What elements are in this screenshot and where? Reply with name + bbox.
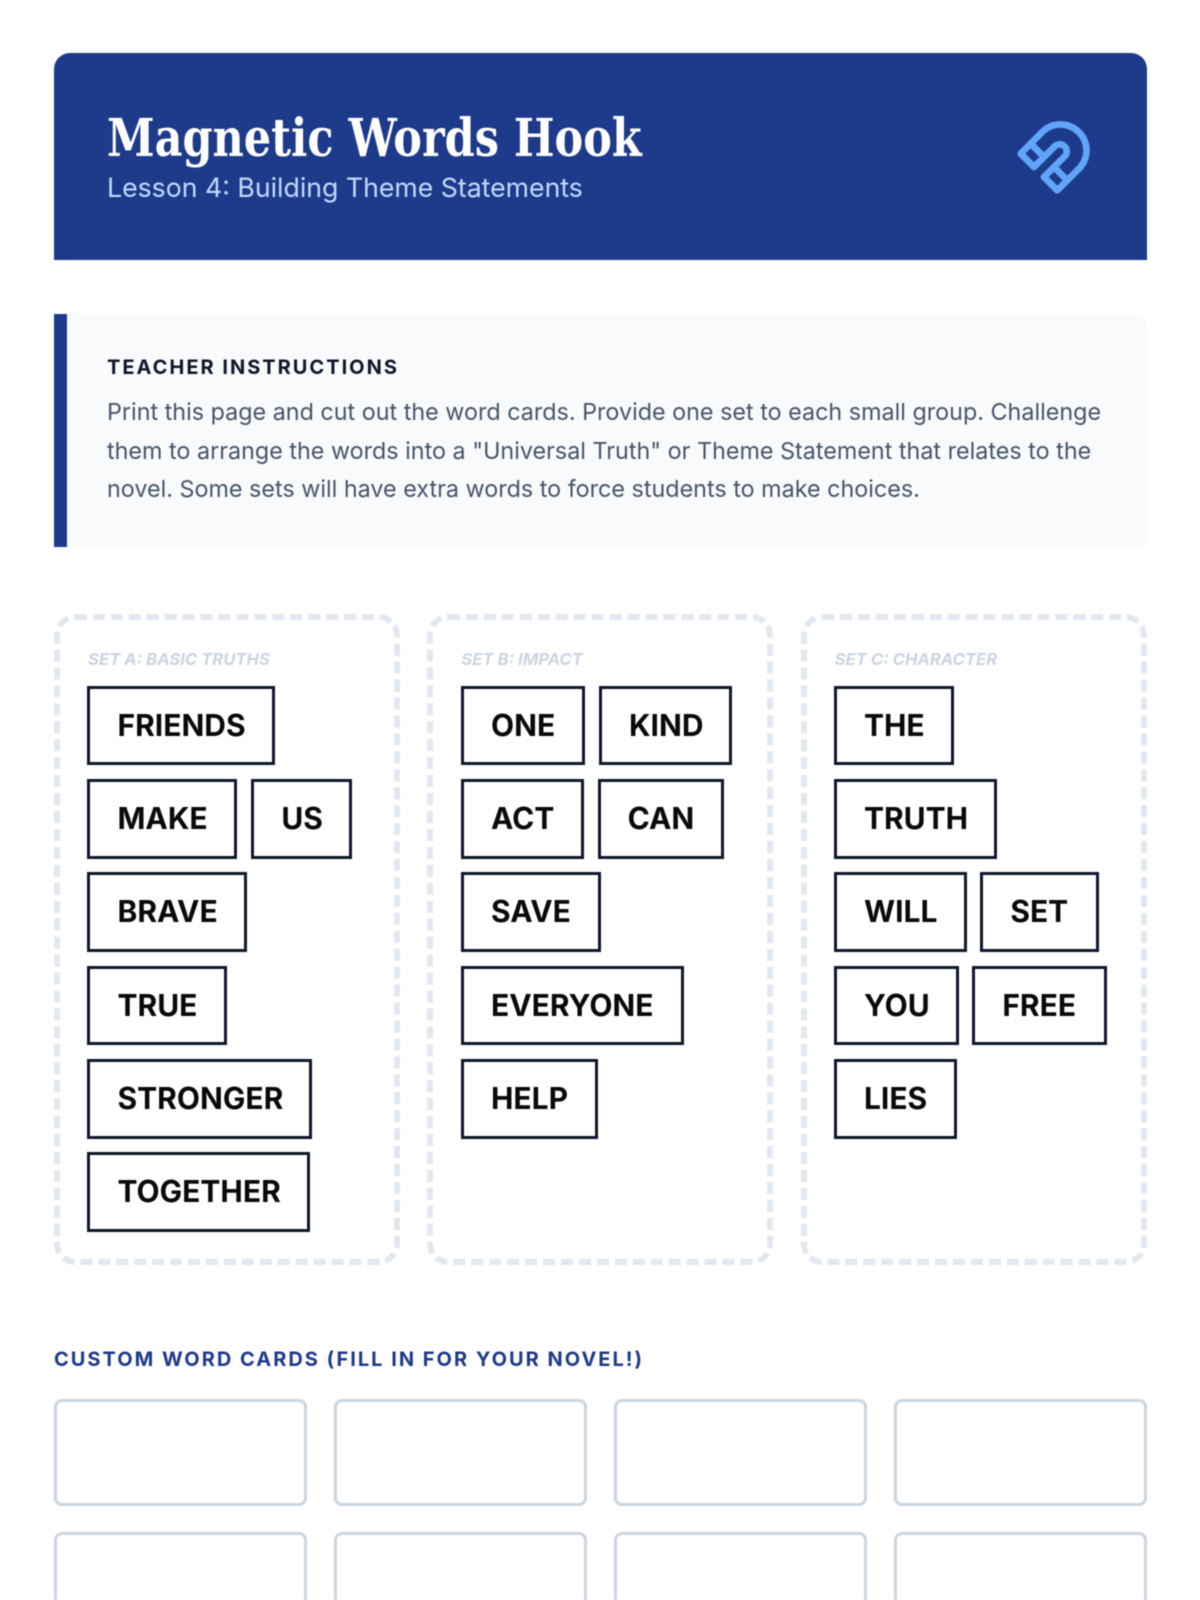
word card: TOGETHER: TOGETHER bbox=[117, 1174, 281, 1210]
word card: ACT: ACT bbox=[491, 801, 554, 837]
word card: ONE: ONE bbox=[491, 708, 555, 744]
title: Magnetic Words Hook bbox=[107, 108, 642, 169]
word card: US bbox=[251, 779, 352, 859]
word card: EVERYONE: EVERYONE bbox=[491, 988, 654, 1024]
word card: LIES bbox=[834, 1059, 957, 1139]
custom word cards heading: CUSTOM WORD CARDS (FILL IN FOR YOUR NOVEL!) bbox=[54, 1347, 644, 1371]
word card: TRUTH: TRUTH bbox=[864, 801, 968, 837]
panel: teacher instructions bbox=[54, 314, 1147, 547]
word card: SET: SET bbox=[1010, 894, 1068, 930]
blank card row 2, column 3 bbox=[614, 1532, 867, 1600]
word card: LIES: LIES bbox=[864, 1081, 927, 1117]
blank card row 1, column 2 bbox=[334, 1399, 587, 1506]
word card: SET bbox=[980, 872, 1099, 952]
blank card row 1, column 4 bbox=[894, 1399, 1147, 1506]
subtitle: Lesson 4: Building Theme Statements bbox=[107, 172, 583, 204]
word card: TRUE: TRUE bbox=[117, 988, 197, 1024]
word card: CAN bbox=[598, 779, 724, 859]
word card: FRIENDS bbox=[87, 686, 275, 765]
blank card row 2, column 1 bbox=[54, 1532, 307, 1600]
word card: BRAVE bbox=[87, 872, 247, 952]
word card: CAN: CAN bbox=[628, 801, 694, 837]
word card: SAVE: SAVE bbox=[491, 894, 571, 930]
set C label: SET C: CHARACTER bbox=[835, 650, 997, 670]
set B label: SET B: IMPACT bbox=[461, 650, 583, 670]
set A label: SET A: BASIC TRUTHS bbox=[88, 650, 270, 670]
word card: KIND bbox=[599, 686, 732, 765]
word card: WILL: WILL bbox=[864, 894, 937, 930]
panel: set C bbox=[801, 614, 1147, 1265]
panel: set B bbox=[427, 614, 773, 1265]
word card: TRUE bbox=[87, 966, 227, 1045]
instructions heading: TEACHER INSTRUCTIONS bbox=[107, 355, 399, 379]
instructions body text: them to arrange the words into a "Universal Truth" or Theme Statement that relates to the bbox=[107, 436, 1091, 465]
word card: MAKE: MAKE bbox=[117, 801, 208, 837]
word card: KIND: KIND bbox=[629, 708, 704, 744]
panel: set A bbox=[54, 614, 400, 1265]
word card: MAKE bbox=[87, 779, 237, 859]
word card: YOU: YOU bbox=[864, 988, 930, 1024]
word card: WILL bbox=[834, 872, 967, 952]
word card: FRIENDS: FRIENDS bbox=[117, 708, 246, 744]
word card: FREE bbox=[972, 966, 1107, 1045]
word card: TRUTH bbox=[834, 779, 997, 859]
word card: THE: THE bbox=[864, 708, 925, 744]
header banner bbox=[54, 53, 1147, 260]
word card: YOU bbox=[834, 966, 959, 1045]
word card: TOGETHER bbox=[87, 1152, 310, 1232]
blank card row 2, column 2 bbox=[334, 1532, 587, 1600]
word card: HELP: HELP bbox=[491, 1081, 568, 1117]
icon: magnet bbox=[1016, 120, 1090, 194]
blank card row 1, column 1 bbox=[54, 1399, 307, 1506]
word card: BRAVE: BRAVE bbox=[117, 894, 218, 930]
word card: FREE: FREE bbox=[1002, 988, 1076, 1024]
blank card row 2, column 4 bbox=[894, 1532, 1147, 1600]
word card: ONE bbox=[461, 686, 585, 765]
word card: US: US bbox=[281, 801, 323, 837]
word card: THE bbox=[834, 686, 954, 765]
word card: STRONGER: STRONGER bbox=[117, 1081, 283, 1117]
word card: SAVE bbox=[461, 872, 601, 952]
instructions body text: novel. Some sets will have extra words to force students to make choices. bbox=[107, 474, 920, 503]
word card: HELP bbox=[461, 1059, 598, 1139]
word card: ACT bbox=[461, 779, 584, 859]
word card: EVERYONE bbox=[461, 966, 684, 1045]
instructions body text: Print this page and cut out the word cards. Provide one set to each small group. Challenge bbox=[107, 397, 1101, 426]
blank card row 1, column 3 bbox=[614, 1399, 867, 1506]
word card: STRONGER bbox=[87, 1059, 312, 1139]
instructions body text bbox=[106, 397, 1101, 503]
